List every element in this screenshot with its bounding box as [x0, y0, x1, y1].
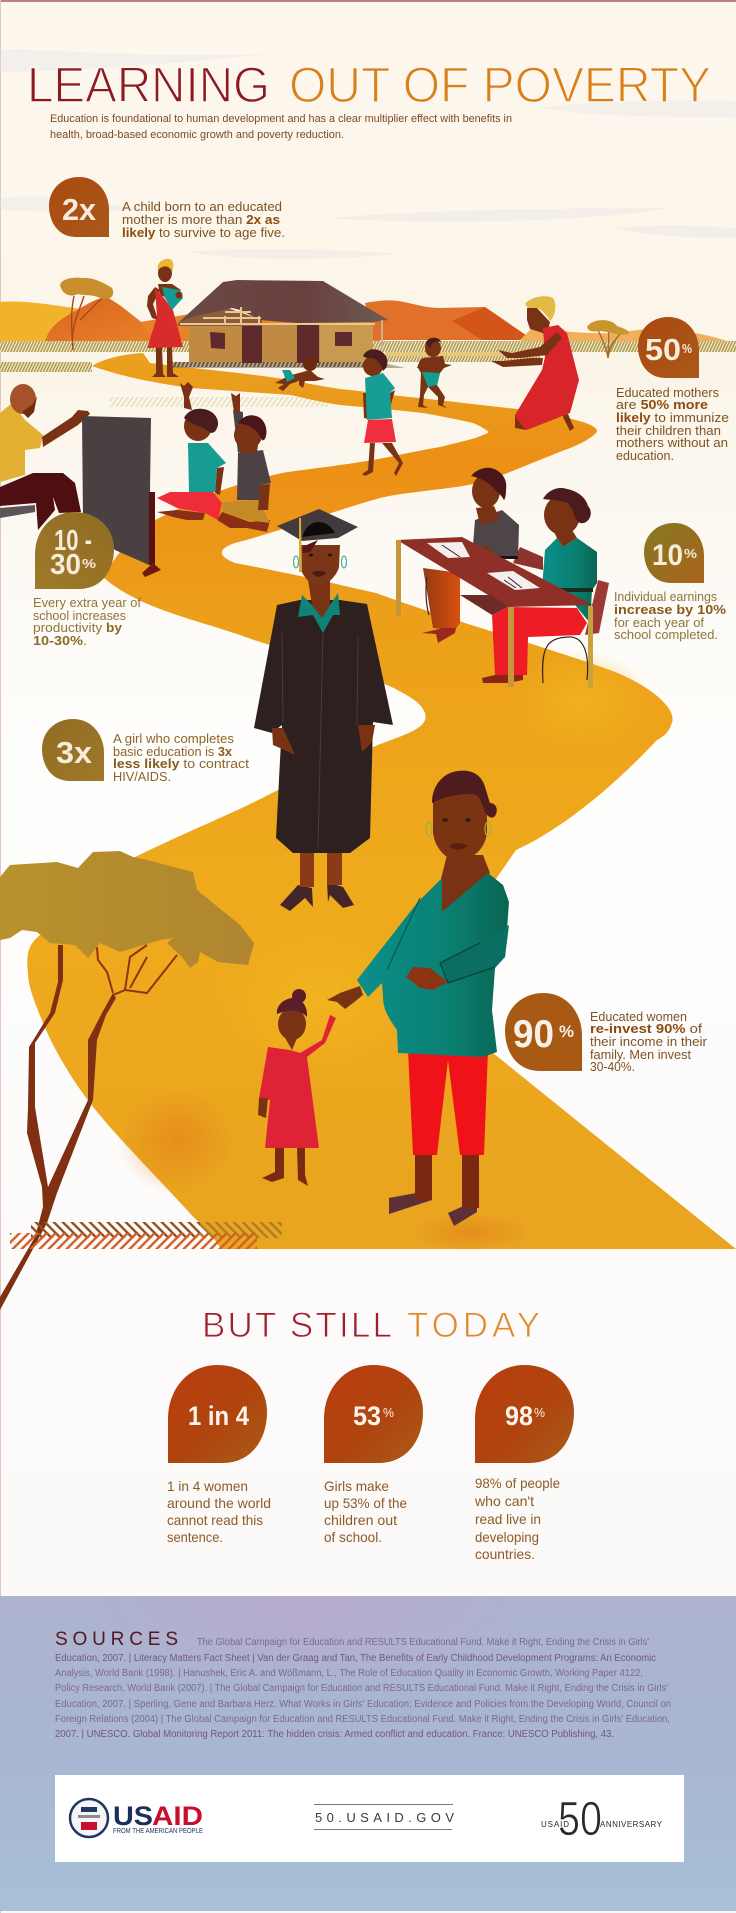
woman carrying baby [147, 259, 183, 377]
standing baby [417, 338, 452, 408]
sources text: Education, 2007. | Literacy Matters Fact Sheet | Van der Graag and Tan, The Benefits of Early Childhood Development Programs: An Economic [55, 1653, 656, 1664]
landscape: hills and horizon [0, 298, 736, 347]
callout: 90%: re-invest 90% of [590, 1021, 702, 1036]
callout: 90%: their income in their [590, 1034, 708, 1049]
callout: 2x: A child born to an educated [122, 199, 282, 214]
crawling baby [275, 357, 325, 391]
logo: USAID: FROM THE AMERICAN PEOPLE [113, 1828, 203, 1835]
callout: 3x: HIV/AIDS. [113, 769, 171, 784]
chevron ground pattern [10, 1222, 282, 1249]
stat: 98% [474, 1365, 574, 1562]
callout: 3x: 3x [56, 735, 93, 770]
callout: 50% [616, 317, 729, 463]
stat: 98%: developing [475, 1529, 539, 1545]
callout: 2x: mother is more than 2x as [122, 212, 280, 227]
stat: 1 in 4 [167, 1365, 271, 1545]
callout: 90%: % [559, 1022, 574, 1041]
stat: 98%: read live in [475, 1511, 541, 1527]
callout: 10% [614, 523, 726, 642]
tree: small left [60, 278, 113, 350]
intro text [50, 113, 512, 141]
logo: USAID 50th anniversary: 50 [558, 1793, 602, 1846]
stat: 1 in 4: around the world [167, 1495, 271, 1511]
callout: 3x [42, 719, 249, 784]
stat: 98%: countries. [475, 1546, 535, 1562]
stat: 98%: % [534, 1405, 545, 1420]
heading: but still today [202, 1306, 540, 1345]
sources text: Policy Research, World Bank (2007). | The Global Campaign for Education and RESULTS Educational Fund. Make it Right, Ending the Crisis in Girls' [55, 1683, 668, 1694]
title: LEARNING [27, 57, 270, 113]
callout: 10%: % [684, 546, 697, 561]
callout: 50%: their children than [616, 423, 721, 438]
intro text: health, broad-based economic growth and poverty reduction. [50, 129, 344, 141]
clouds [0, 50, 736, 259]
sources text: Analysis, World Bank (1998). | Hanushek, Eric A. and Wößmann, L., The Role of Education Quality in Economic Growth, Working Paper 4122, [55, 1668, 643, 1679]
callout: 10%: 10 [652, 539, 683, 572]
callout: 3x: less likely to contract [113, 756, 249, 771]
intro text: Education is foundational to human development and has a clear multiplier effect with benefits in [50, 113, 512, 125]
stat: 98%: who can't [474, 1493, 534, 1509]
callout: 10%: increase by 10% [614, 602, 726, 617]
girl holding hand [258, 989, 336, 1186]
stat: 53%: % [383, 1405, 394, 1420]
sources text: 2007. | UNESCO. Global Monitoring Report 2011: The hidden crisis: Armed conflict and education. France: UNESCO Publishing, 43. [55, 1729, 614, 1740]
stat: 53%: up 53% of the [324, 1495, 407, 1511]
child walking [362, 349, 403, 476]
stat: 53%: 53 [353, 1401, 381, 1431]
callout: 10-30%: school increases [33, 608, 126, 623]
stat: 1 in 4: sentence. [167, 1529, 223, 1545]
callout: 50%: % [682, 341, 692, 356]
callout: 10-30%: 10 - [54, 525, 92, 557]
callout: 90%: Educated women [590, 1009, 687, 1024]
stat: 98%: 98 [505, 1401, 533, 1431]
logo: USAID [70, 1799, 203, 1837]
url: 50.usaid.gov: 50.USAID.GOV [315, 1810, 454, 1825]
callout: 3x: A girl who completes [113, 731, 234, 746]
stat: 53%: children out [324, 1512, 397, 1528]
sources text: Education, 2007. | Sperling, Gene and Barbara Herz. What Works in Girls' Education; Evidence and Policies from the Developing World, Council on [55, 1699, 671, 1710]
panel: sources [0, 1596, 736, 1911]
callout: 10-30%: 30 [50, 549, 81, 581]
callout: 90%: 30-40%. [590, 1059, 635, 1074]
callout: 10-30%: Every extra year of [33, 595, 141, 610]
teacher and blackboard [0, 384, 161, 577]
left edge line [0, 0, 1, 1913]
callout: 2x [49, 177, 285, 240]
stat: 1 in 4: 1 in 4 [188, 1401, 249, 1431]
logo: USAID: AID [152, 1801, 203, 1831]
logo: USAID 50th anniversary [541, 1793, 663, 1846]
title [27, 57, 711, 113]
stat: 98%: 98% of people [475, 1475, 560, 1491]
callout: 2x: likely to survive to age five. [122, 225, 285, 240]
callout: 90%: family. Men invest [590, 1047, 691, 1062]
top border line [0, 0, 736, 2]
callout: 50%: education. [616, 448, 674, 463]
callout: 10-30% [33, 512, 141, 648]
callout: 50%: Educated mothers [616, 385, 719, 400]
callout: 10-30%: 10-30% . [33, 633, 87, 648]
heading: but still today: TODAY [407, 1306, 540, 1345]
callout: 10-30%: % [82, 556, 97, 571]
sources text: Foreign Relations (2004) | The Global Campaign for Education and RESULTS Educational Fund. Make it Right, Ending the Crisis in Girls' Education, [55, 1714, 670, 1725]
callout: 10%: for each year of [614, 615, 704, 630]
callout: 2x: 2x [62, 192, 97, 227]
children raising hands [157, 382, 271, 532]
stat: 53%: Girls make [324, 1478, 389, 1494]
tree: small right [587, 320, 629, 358]
callout: 50%: are 50% more [616, 397, 708, 412]
big acacia tree [0, 851, 254, 1310]
callout: 10-30%: productivity by [33, 620, 123, 635]
title: OUT OF POVERTY [289, 57, 711, 113]
callout: 50%: likely to immunize [616, 410, 729, 425]
logo: USAID: US [113, 1801, 153, 1831]
heading: but still today: BUT STILL [202, 1306, 392, 1345]
logo: USAID 50th anniversary: USAID [541, 1820, 569, 1829]
sources text: The Global Campaign for Education and RESULTS Educational Fund. Make it Right, Ending the Crisis in Girls' [197, 1637, 649, 1648]
logo strip [55, 1775, 684, 1862]
kneeling woman in red [491, 296, 579, 431]
callout: 10%: Individual earnings [614, 589, 717, 604]
graduate [254, 509, 393, 911]
callout: 50%: 50 [645, 332, 681, 367]
hut [172, 280, 405, 368]
sources text [55, 1637, 671, 1740]
stat: 53% [324, 1365, 423, 1545]
ground hatching [0, 341, 736, 407]
callout: 10%: school completed. [614, 627, 718, 642]
stat: 1 in 4: 1 in 4 women [167, 1478, 248, 1494]
logo: USAID 50th anniversary: ANNIVERSARY [600, 1820, 663, 1829]
stat: 1 in 4: cannot read this [167, 1512, 263, 1528]
mother [327, 771, 509, 1226]
callout: 90% [505, 993, 708, 1074]
sources heading: SOURCES [55, 1629, 178, 1650]
students at desk [396, 468, 609, 688]
stat: 53%: of school. [324, 1529, 382, 1545]
callout: 90%: 90 [513, 1013, 554, 1056]
winding road [27, 353, 736, 1252]
callout: 3x: basic education is 3x [113, 744, 233, 759]
callout: 50%: mothers without an [616, 435, 728, 450]
